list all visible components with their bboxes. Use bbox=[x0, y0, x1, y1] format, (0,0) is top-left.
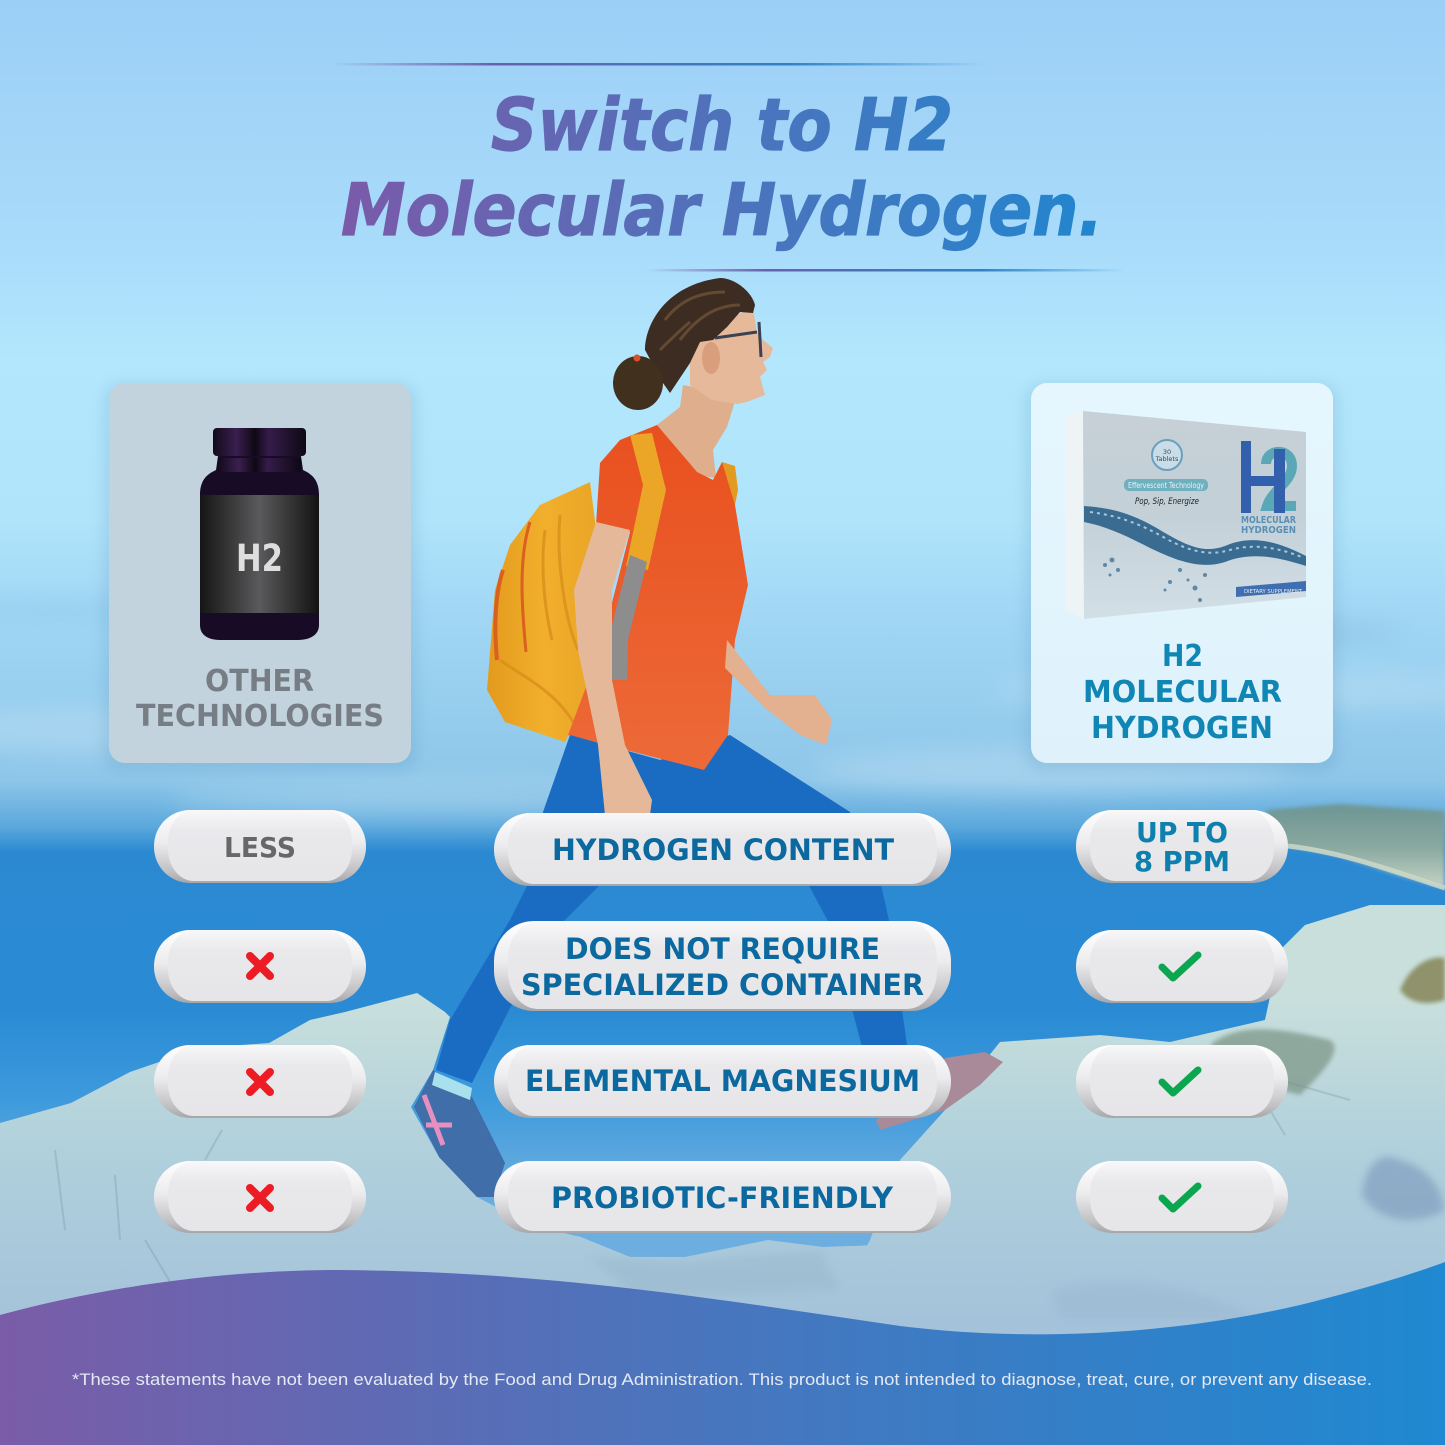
far shoulder strap bbox=[722, 462, 738, 515]
background: rock vegetation and shading bbox=[55, 957, 1445, 1320]
hair bbox=[645, 278, 755, 393]
near arm and hand bbox=[574, 522, 652, 815]
row 2: other technologies pill bbox=[154, 930, 366, 1003]
background: distant coastline bbox=[1265, 804, 1445, 888]
backpack bbox=[487, 482, 600, 742]
heading: other technologies bbox=[136, 664, 384, 734]
product box bbox=[1065, 411, 1306, 619]
label: DOES NOT REQUIRE bbox=[565, 932, 880, 966]
panel card bbox=[1031, 383, 1333, 763]
heading: H2 molecular hydrogen: MOLECULAR bbox=[1083, 675, 1282, 710]
bottom wave band bbox=[0, 1262, 1445, 1445]
dietary supplement banner: DIETARY SUPPLEMENT bbox=[1244, 589, 1303, 595]
row 4: H2 pill bbox=[1076, 1161, 1288, 1233]
near shoe bbox=[414, 1070, 505, 1197]
heading: other technologies: OTHER bbox=[205, 664, 314, 699]
molecular hydrogen wordmark bbox=[1241, 515, 1296, 536]
title bbox=[341, 83, 1103, 252]
shirt bbox=[568, 425, 748, 770]
panel: H2 molecular hydrogen bbox=[1025, 383, 1339, 771]
far leg bbox=[660, 735, 907, 1047]
shoe accent bbox=[424, 1095, 452, 1145]
near leg bbox=[436, 735, 704, 1083]
background: left rock bbox=[0, 993, 880, 1345]
effervescent tag bbox=[1124, 479, 1208, 491]
icon: green check bbox=[1162, 955, 1198, 978]
slogan: Pop, Sip, Energize bbox=[1135, 497, 1199, 507]
icon: red cross bbox=[250, 956, 270, 976]
row 4: other technologies pill bbox=[154, 1161, 366, 1233]
hair tie bbox=[634, 354, 640, 362]
row 3: H2 pill bbox=[1076, 1045, 1288, 1118]
label: HYDROGEN CONTENT bbox=[552, 833, 894, 867]
icon: red cross bbox=[250, 1188, 270, 1208]
disclaimer: *These statements have not been evaluated by the Food and Drug Administration. This product is not intended to diagnose, treat, cure, or prevent any disease. bbox=[72, 1370, 1372, 1389]
heading: other technologies: TECHNOLOGIES bbox=[136, 699, 384, 734]
label bbox=[521, 932, 924, 1002]
icon: dark supplement bottle bbox=[200, 428, 319, 640]
sock bbox=[432, 1072, 472, 1100]
row 1: hydrogen content pill bbox=[494, 813, 951, 886]
molecular hydrogen wordmark: MOLECULAR bbox=[1241, 515, 1296, 526]
person walking bbox=[414, 278, 1003, 1197]
molecular hydrogen wordmark: HYDROGEN bbox=[1241, 525, 1296, 536]
water shimmer bbox=[1090, 512, 1304, 558]
row 3: other technologies pill bbox=[154, 1045, 366, 1118]
background: right rock bbox=[820, 905, 1445, 1345]
effervescent tag: Effervescent Technology bbox=[1128, 481, 1204, 490]
value: up to 8 ppm: 8 PPM bbox=[1134, 845, 1230, 878]
head face bbox=[690, 308, 773, 404]
backpack fabric folds bbox=[495, 515, 578, 725]
far arm bbox=[725, 640, 832, 745]
row 3: elemental magnesium pill bbox=[494, 1045, 951, 1118]
glasses bbox=[715, 322, 761, 357]
shoulder strap bbox=[626, 433, 666, 570]
title: Molecular Hydrogen. bbox=[341, 168, 1103, 252]
hair highlights bbox=[660, 292, 740, 350]
row 1: other technologies pill bbox=[154, 810, 366, 883]
H2 logo bbox=[1241, 441, 1296, 513]
icon: red cross bbox=[250, 1072, 270, 1092]
dietary supplement banner bbox=[1236, 581, 1306, 597]
bottle label text: H2 bbox=[236, 537, 283, 580]
row 2: H2 pill bbox=[1076, 930, 1288, 1003]
tablets badge: Tablets bbox=[1155, 455, 1179, 463]
panel: other technologies bbox=[103, 383, 417, 771]
panel card bbox=[109, 383, 411, 763]
icon: green check bbox=[1162, 1186, 1198, 1209]
row 4: probiotic-friendly pill bbox=[494, 1161, 951, 1233]
value: up to 8 ppm: UP TO bbox=[1136, 816, 1228, 849]
far shoe bbox=[876, 1052, 1003, 1130]
title: Switch to H2 bbox=[491, 83, 953, 167]
value: less: LESS bbox=[224, 831, 296, 864]
title rule top bbox=[330, 63, 985, 66]
ear bbox=[702, 342, 720, 374]
grey webbing strap bbox=[612, 555, 647, 680]
bubbles on box bbox=[1103, 558, 1207, 602]
row 1: H2 pill bbox=[1076, 810, 1288, 883]
label: PROBIOTIC-FRIENDLY bbox=[551, 1181, 894, 1215]
tablets badge bbox=[1152, 440, 1182, 470]
tablets badge: 30 bbox=[1163, 448, 1171, 456]
title rule bottom bbox=[645, 269, 1125, 272]
label: ELEMENTAL MAGNESIUM bbox=[525, 1064, 920, 1098]
value: up to 8 ppm bbox=[1134, 816, 1230, 878]
neck bbox=[657, 385, 737, 478]
label: SPECIALIZED CONTAINER bbox=[521, 968, 924, 1002]
background: mist clouds bbox=[0, 602, 1445, 818]
heading: H2 molecular hydrogen bbox=[1083, 639, 1282, 746]
water wave on box bbox=[1084, 506, 1306, 566]
row 2: specialized container pill bbox=[494, 921, 951, 1011]
icon: green check bbox=[1162, 1070, 1198, 1093]
heading: H2 molecular hydrogen: HYDROGEN bbox=[1091, 711, 1273, 746]
heading: H2 molecular hydrogen: H2 bbox=[1162, 639, 1203, 674]
hair bun bbox=[613, 356, 663, 410]
